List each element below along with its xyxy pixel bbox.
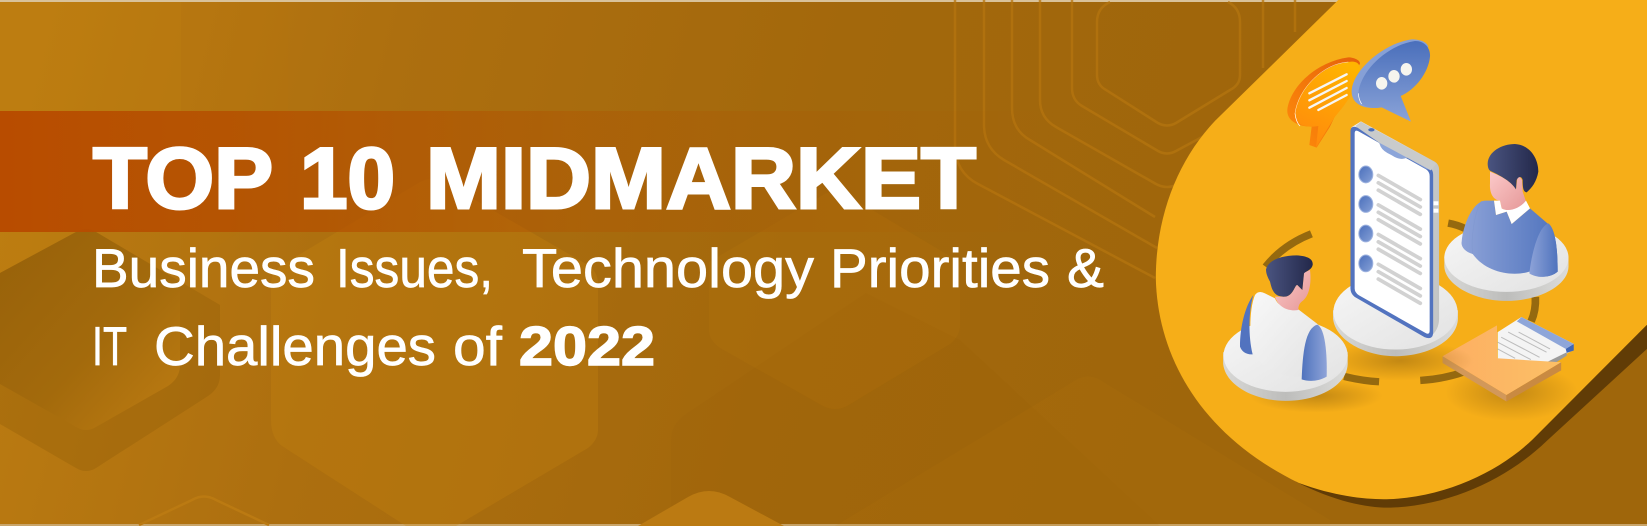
person: left <box>1240 255 1327 381</box>
bottom right hexagon <box>835 376 1330 526</box>
outlined top-right hexagons <box>955 0 1295 278</box>
subtitle line 1: Technology <box>522 237 815 299</box>
title: TOP <box>93 131 273 227</box>
subtitle line 1: Priorities <box>830 237 1050 299</box>
subtitle line 1: & <box>1067 237 1104 299</box>
bottom light peak <box>638 491 784 526</box>
left inner hexagon <box>0 229 180 430</box>
lower middle hexagon <box>671 293 1160 526</box>
phone list dots <box>1359 166 1373 272</box>
panel shadow <box>1295 322 1647 508</box>
icon: blue speech bubble <box>1352 39 1430 122</box>
year: 2022 <box>519 315 655 377</box>
subtitle line 2 <box>92 315 503 377</box>
bottom left outline <box>139 496 269 525</box>
red title band <box>0 111 1060 232</box>
subtitle line 1: Business <box>92 237 315 299</box>
top-left tone panels <box>0 2 181 273</box>
title: MIDMARKET <box>426 131 976 227</box>
title <box>93 131 976 227</box>
yellow panel with illustration <box>1156 0 1647 508</box>
middle hexagon <box>709 192 960 409</box>
subtitle line 2: IT <box>92 315 127 377</box>
panel shape <box>1156 0 1647 499</box>
phone <box>1350 121 1439 338</box>
left dark hexagon <box>0 229 220 471</box>
left platform <box>1223 319 1383 413</box>
right platform <box>1444 223 1569 301</box>
icon: orange speech bubble <box>1287 57 1360 148</box>
centre hexagon <box>271 179 598 526</box>
title: 10 <box>300 131 395 227</box>
subtitle line 1 <box>92 237 1104 299</box>
subtitle line 2: of <box>453 315 503 377</box>
icon: envelope and document <box>1443 317 1578 421</box>
subtitle line 1: Issues, <box>336 237 493 299</box>
connection ring <box>1266 223 1535 382</box>
centre platform <box>1327 274 1473 381</box>
subtitle line 2: Challenges <box>154 315 436 377</box>
phone list lines <box>1378 175 1420 303</box>
person: right <box>1462 144 1558 277</box>
